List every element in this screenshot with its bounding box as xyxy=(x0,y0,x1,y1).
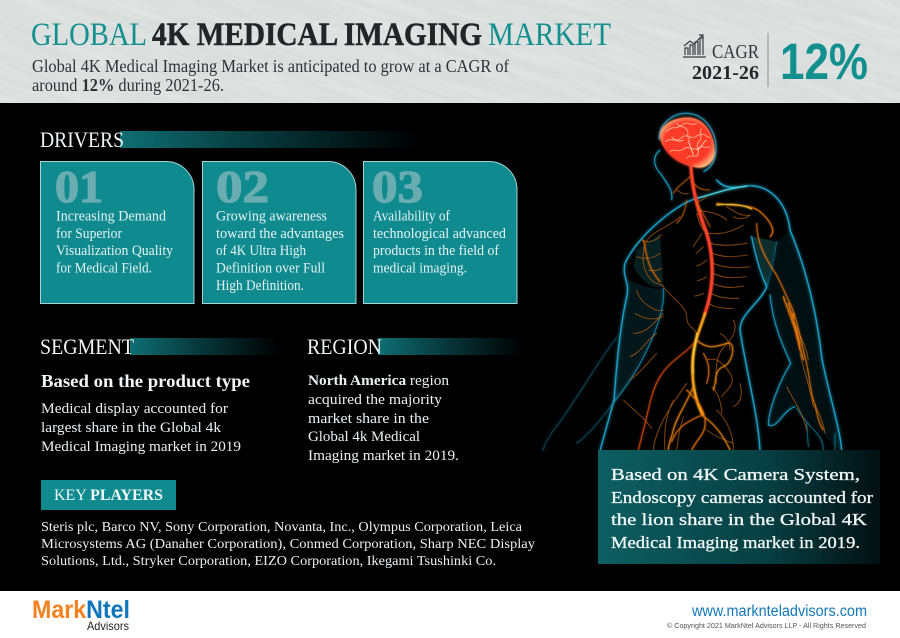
title xyxy=(31,17,611,53)
text block: region: North America region xyxy=(308,373,450,389)
brain folds xyxy=(665,123,710,158)
CAGR badge: 2021-26 xyxy=(692,62,759,84)
panel: driver 01 xyxy=(40,161,194,304)
heading: segment xyxy=(40,334,280,359)
panel: driver 03: Availability of xyxy=(373,208,450,224)
panel: driver 02: Definition over Full xyxy=(216,260,325,276)
illustration: glowing human nervous system xyxy=(543,113,842,451)
panel: driver 02: 02 xyxy=(216,161,269,212)
subtitle xyxy=(32,56,509,95)
text block: segment: Medical display accounted for xyxy=(41,401,228,417)
key players label xyxy=(41,480,176,510)
text block: key players: Microsystems AG (Danaher Corporation), Conmed Corporation, Sharp NEC Display xyxy=(41,537,535,552)
text block: key players xyxy=(41,520,535,569)
CAGR badge: 12% xyxy=(780,33,868,90)
panel: driver 01: for Medical Field. xyxy=(56,260,152,276)
logo: MarkNtel Advisors: Advisors xyxy=(87,619,129,633)
heading: drivers: DRIVERS xyxy=(40,127,124,152)
nerves: bright orange trunks xyxy=(638,177,823,450)
panel: driver 01: Increasing Demand xyxy=(56,208,167,224)
panel: driver 02: Growing awareness xyxy=(216,208,327,224)
text block: region xyxy=(308,373,459,464)
heading: drivers xyxy=(40,127,420,152)
panel: driver 03: technological advanced xyxy=(373,226,507,242)
text block: segment: largest share in the Global 4k xyxy=(41,420,222,436)
panel: driver 02: of 4K Ultra High xyxy=(216,243,307,259)
head glow outline xyxy=(659,113,716,172)
panel: driver 01: for Superior xyxy=(56,226,122,242)
CAGR badge: CAGR xyxy=(712,41,760,63)
text block: region: market share in the xyxy=(308,411,429,427)
callout: camera system: Endoscopy cameras accounted for xyxy=(611,488,873,507)
key players label: KEY PLAYERS xyxy=(54,487,163,504)
text block: key players: Solutions, Ltd., Stryker Corporation, EIZO Corporation, Ikegami Tsushinki Co. xyxy=(41,554,496,569)
callout: camera system: Medical Imaging market in 2019. xyxy=(611,533,860,552)
panel: driver 01: 01 xyxy=(55,161,103,212)
panel: driver 03: 03 xyxy=(372,161,423,212)
panel: driver 01: Visualization Quality xyxy=(56,243,174,259)
panel: driver 03 xyxy=(364,161,517,304)
icon: growth chart xyxy=(683,35,706,57)
callout: camera system: the lion share in the Global 4K xyxy=(611,510,868,529)
body outline xyxy=(543,150,842,451)
panel: driver 02 xyxy=(202,161,356,304)
panel: driver 02: toward the advantages xyxy=(216,226,344,242)
title: 4K MEDICAL IMAGING xyxy=(152,17,482,53)
callout: camera system: Based on 4K Camera System, xyxy=(611,465,860,484)
header band xyxy=(0,0,900,458)
text block: region: Global 4k Medical xyxy=(308,429,420,445)
heading: region: REGION xyxy=(307,334,382,359)
text block: segment: Medical Imaging market in 2019 xyxy=(41,439,241,455)
panel: driver 03: products in the field of xyxy=(373,243,499,259)
panel: driver 03: medical imaging. xyxy=(373,260,467,276)
title: GLOBAL xyxy=(31,17,147,53)
chest and arm overlap patches xyxy=(633,233,663,287)
text block: region: Imaging market in 2019. xyxy=(308,448,459,464)
CAGR badge xyxy=(683,33,868,90)
text block: region: acquired the majority xyxy=(308,392,443,408)
heading: segment: SEGMENT xyxy=(40,334,135,359)
text block: segment: Based on the product type xyxy=(41,371,250,391)
footer band xyxy=(0,591,900,638)
logo: MarkNtel Advisors: MarkNtel xyxy=(32,596,130,624)
subtitle: Global 4K Medical Imaging Market is anticipated to grow at a CAGR of xyxy=(32,56,509,76)
title: MARKET xyxy=(488,17,611,53)
subtitle: around 12% during 2021-26. xyxy=(32,75,224,95)
spinal cord xyxy=(691,163,712,415)
text block: key players: Steris plc, Barco NV, Sony Corporation, Novanta, Inc., Olympus Corporation, Leica xyxy=(41,520,523,535)
callout: camera system xyxy=(598,450,880,564)
website url: www.marknteladvisors.com xyxy=(691,603,867,620)
nerves: ribs and branches xyxy=(623,190,825,450)
panel: driver 02: High Definition. xyxy=(216,278,304,294)
brain xyxy=(660,118,715,168)
heading: region xyxy=(307,334,523,359)
text block: segment xyxy=(41,371,250,455)
copyright: © Copyright 2021 MarkNtel Advisors LLP - All Rights Reserved xyxy=(667,621,866,630)
